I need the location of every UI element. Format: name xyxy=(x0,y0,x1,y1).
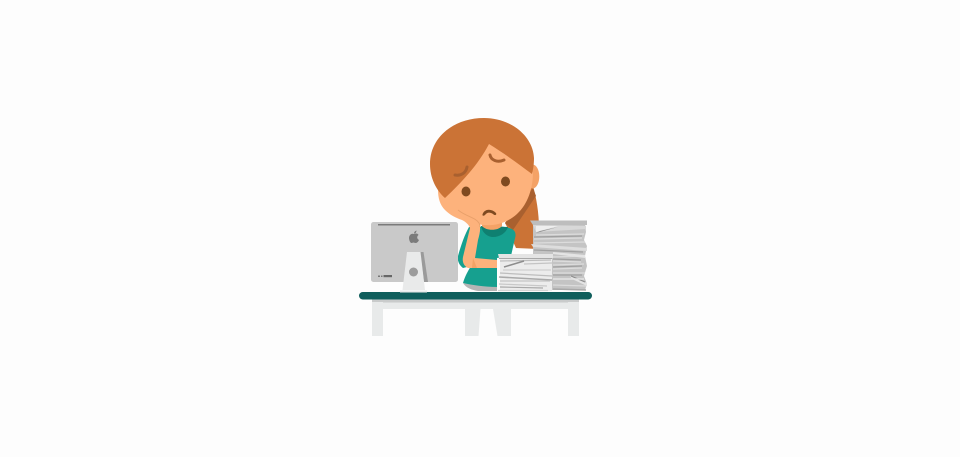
computer monitor xyxy=(371,222,458,292)
right ear xyxy=(526,164,539,188)
desk xyxy=(359,292,592,336)
icon: apple logo xyxy=(409,230,419,243)
tall paper stack xyxy=(530,220,587,290)
face xyxy=(445,143,533,227)
back hair xyxy=(505,186,539,249)
hair front xyxy=(430,118,534,198)
facial features xyxy=(455,155,510,216)
torso in teal shirt xyxy=(458,221,516,291)
monitor label xyxy=(378,275,392,277)
short paper stack xyxy=(498,254,553,291)
left hand and arm xyxy=(438,190,497,268)
